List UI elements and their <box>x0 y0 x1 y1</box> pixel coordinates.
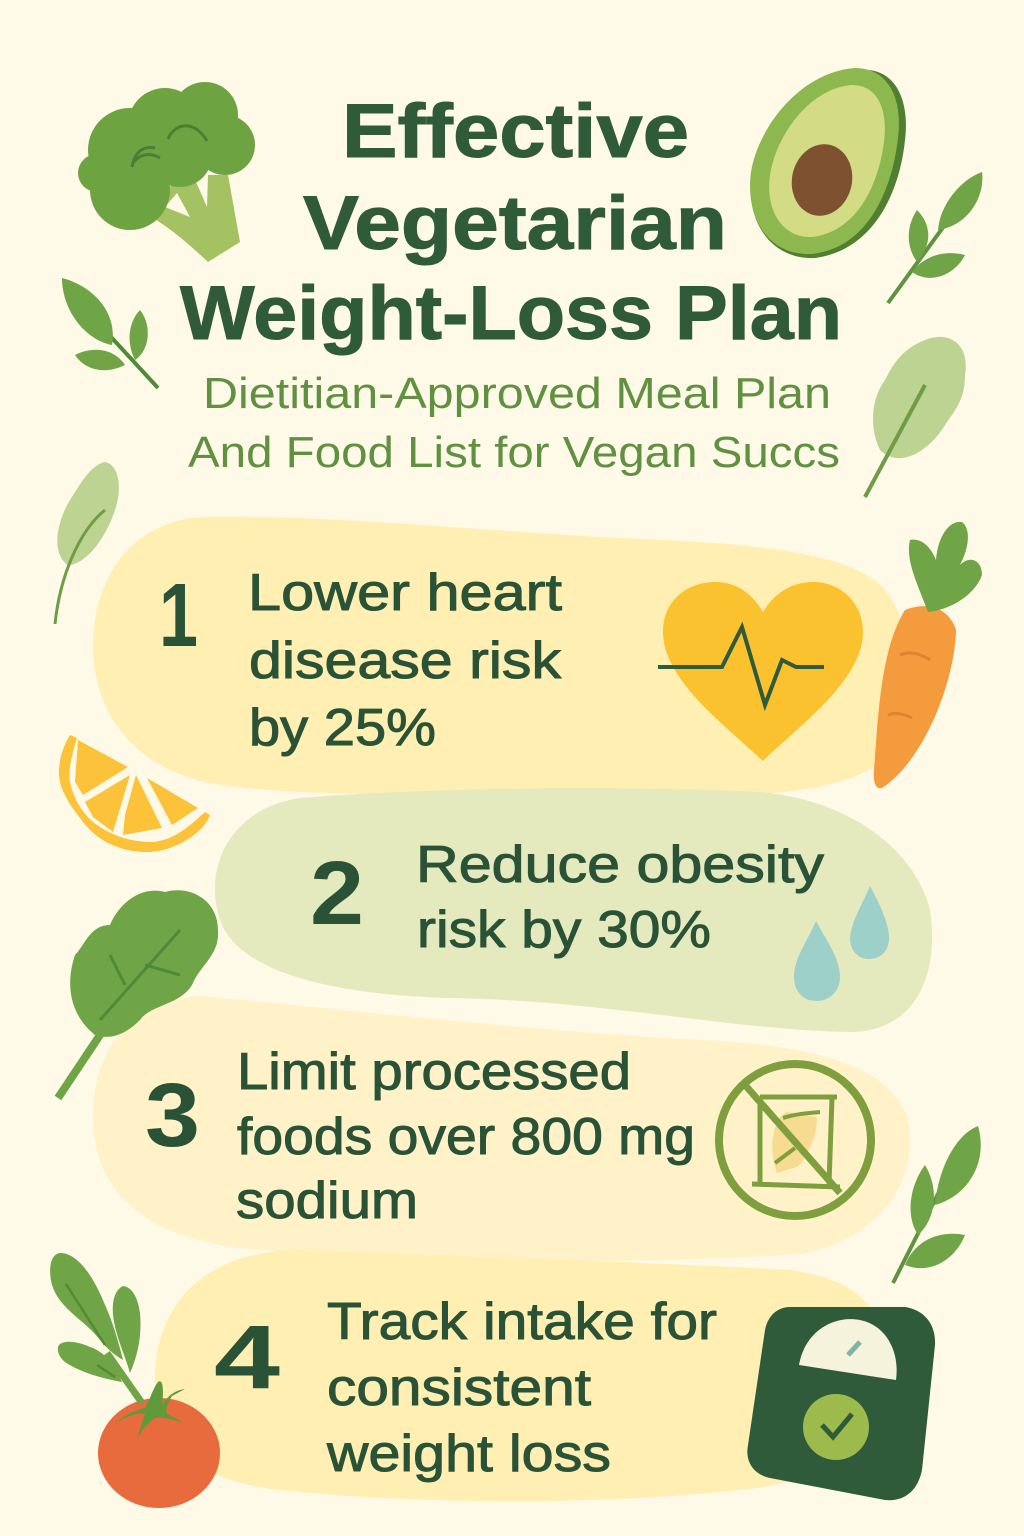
icon: avocado <box>750 68 906 258</box>
panel: step 4 <box>155 1250 935 1501</box>
step 4 text: Track intake for <box>327 1293 717 1351</box>
title <box>180 89 842 356</box>
icon: leaf right lower <box>893 1126 981 1283</box>
subtitle: Dietitian-Approved Meal Plan <box>203 369 831 418</box>
step 2 text: risk by 30% <box>417 901 711 959</box>
icon: weighing scale <box>747 1307 935 1500</box>
step 1 text: by 25% <box>249 699 436 757</box>
icon: lemon slice <box>59 735 210 852</box>
icon: leaf top right <box>888 172 982 303</box>
subtitle: And Food List for Vegan Succs <box>188 428 840 477</box>
panel: step 3 <box>93 996 910 1261</box>
step 3 text: sodium <box>236 1172 418 1230</box>
step 1 text: disease risk <box>249 632 562 690</box>
title: Vegetarian <box>303 181 727 266</box>
icon: large leaf <box>58 890 218 1098</box>
icon: carrot <box>874 522 982 788</box>
step 4 text <box>326 1293 717 1483</box>
title: Effective <box>342 89 689 174</box>
step 2 text <box>416 836 824 959</box>
step 1 text: Lower heart <box>248 564 563 622</box>
icon: leaf left upper <box>62 278 158 388</box>
step 2 text: Reduce obesity <box>416 836 824 894</box>
icon: pale leaf right <box>865 337 966 497</box>
step 1 number: 1 <box>159 566 198 666</box>
icon: pale leaf left <box>55 462 119 624</box>
icon: tomato with leaves <box>50 1253 220 1508</box>
panel: step 2 <box>215 788 932 1032</box>
icon: heart with pulse <box>658 582 863 761</box>
step 1 text <box>248 564 563 757</box>
icon: broccoli <box>78 82 255 262</box>
step 3 text: Limit processed <box>237 1043 631 1101</box>
subtitle <box>188 369 840 477</box>
step 4 text: consistent <box>327 1359 592 1417</box>
icon: no processed food <box>719 1064 871 1216</box>
icon: water drops <box>794 886 889 1001</box>
step 3 number: 3 <box>145 1066 200 1166</box>
step 4 text: weight loss <box>326 1425 611 1483</box>
step 2 number: 2 <box>310 844 364 944</box>
step 3 text: foods over 800 mg <box>237 1108 695 1166</box>
panel: step 1 <box>93 517 909 796</box>
title: Weight-Loss Plan <box>180 271 842 356</box>
step 3 text <box>236 1043 695 1230</box>
step 4 number: 4 <box>214 1308 280 1408</box>
